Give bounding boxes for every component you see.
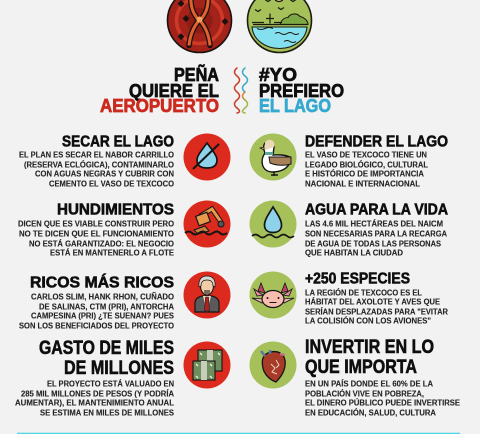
panel: gasto de miles de millones: SE ESTIMA EN MILES DE MILLONES xyxy=(40,409,174,418)
panel: ricos más ricos: CAMPESINA (PRI) ¿TE SUENAN? PUES xyxy=(31,312,174,321)
panel: invertir en lo que importa xyxy=(305,337,460,418)
panel: ricos más ricos: CARLOS SLIM, HANK RHON, CUÑADO xyxy=(31,293,174,302)
panel: +250 especies: HÁBITAT DEL AXOLOTE Y AVES QUE xyxy=(305,298,440,307)
panel: hundimientos: NO ESTÁ GARANTIZADO: EL NEGOCIO xyxy=(29,240,174,249)
panel: gasto de miles de millones: GASTO DE MILES xyxy=(39,338,174,359)
panel: +250 especies: SERÍAN DESPLAZADAS PARA "EVITAR xyxy=(305,308,448,317)
panel: agua para la vida: LAS 4.6 MIL HECTÁREAS DEL NAICM xyxy=(305,220,443,229)
icon: anatomical heart xyxy=(250,342,296,388)
panel: secar el lago: CON AGUAS NEGRAS Y CUBRIR CON xyxy=(35,170,174,179)
panel: secar el lago: SECAR EL LAGO xyxy=(62,134,174,150)
panel: agua para la vida: AGUA PARA LA VIDA xyxy=(305,202,448,218)
panel: gasto de miles de millones xyxy=(15,338,174,418)
icon: sinking excavator xyxy=(184,200,230,248)
panel: ricos más ricos: RICOS MÁS RICOS xyxy=(30,272,174,292)
panel: gasto de miles de millones: 285 MIL MILLONES DE PESOS (Y PODRÍA xyxy=(21,390,174,399)
panel: invertir en lo que importa: EN EDUCACIÓN, SALUD, CULTURA xyxy=(305,409,436,418)
footer bar edge xyxy=(17,433,460,434)
panel: hundimientos: NO TE DICEN QUE EL FUNCIONAMIENTO xyxy=(19,230,174,239)
title: yo prefiero el lago: PREFIERO xyxy=(259,81,344,101)
title: Peña quiere el aeropuerto: QUIERE EL xyxy=(129,81,219,101)
panel: ricos más ricos: DE SALINAS, CTM (PRI), ANTORCHA xyxy=(39,303,174,312)
panel: invertir en lo que importa: EL DINERO PÚBLICO PUEDE INVERTIRSE xyxy=(305,399,460,408)
title: yo prefiero el lago: EL LAGO xyxy=(259,96,331,116)
icon: crossed water drop xyxy=(184,134,230,180)
panel: secar el lago: CEMENTO EL VASO DE TEXCOCO xyxy=(49,180,174,189)
title: Peña quiere el aeropuerto xyxy=(100,64,219,116)
title: Peña quiere el aeropuerto: AEROPUERTO xyxy=(100,96,219,116)
panel: invertir en lo que importa: INVERTIR EN LO xyxy=(305,337,434,358)
title: yo prefiero el lago xyxy=(259,65,344,116)
panel: hundimientos: DICEN QUE ES VIABLE CONSTRUIR PERO xyxy=(18,220,174,229)
panel: defender el lago: E HISTÓRICO DE IMPORTANCIA xyxy=(305,170,424,179)
icon: water drop over waves xyxy=(250,200,296,248)
panel: invertir en lo que importa: EN UN PAÍS DONDE EL 60% DE LA xyxy=(305,380,433,389)
panel: gasto de miles de millones: AUMENTAR), EL MANTENIMIENTO ANUAL xyxy=(15,399,174,408)
panel: hundimientos: HUNDIMIENTOS xyxy=(57,202,174,218)
panel: ricos más ricos: SON LOS BENEFICIADOS DEL PROYECTO xyxy=(19,322,174,331)
icon: lake green emblem xyxy=(248,0,312,52)
panel: defender el lago xyxy=(305,134,448,189)
panel: agua para la vida xyxy=(305,202,448,258)
panel: +250 especies: +250 ESPECIES xyxy=(305,270,410,288)
panel: secar el lago: (RESERVA ECLÓGICA), CONTAMINARLO xyxy=(24,161,174,170)
panel: +250 especies xyxy=(305,270,448,326)
panel: gasto de miles de millones: EL PROYECTO ESTÁ VALUADO EN xyxy=(47,380,174,389)
title: Peña quiere el aeropuerto: PEÑA xyxy=(174,64,219,85)
panel: defender el lago: EL VASO DE TEXCOCO TIENE UN xyxy=(305,151,427,160)
icon: duck xyxy=(250,134,296,180)
panel: agua para la vida: QUE HABITAN LA CIUDAD xyxy=(305,249,403,258)
panel: secar el lago: EL PLAN ES SECAR EL NABOR CARRILLO xyxy=(19,151,174,160)
panel: agua para la vida: SON NECESARIAS PARA LA RECARGA xyxy=(305,230,447,239)
panel: hundimientos xyxy=(18,202,174,258)
icon: rich man portrait xyxy=(184,272,230,318)
panel: +250 especies: LA COLISIÓN CON LOS AVIONES" xyxy=(305,317,431,326)
panel: defender el lago: LEGADO BIOLÓGICO, CULTURAL xyxy=(305,161,428,170)
panel: invertir en lo que importa: POBLACIÓN VIVE EN POBREZA, xyxy=(305,390,424,399)
icon: airport red emblem xyxy=(168,0,232,52)
panel: secar el lago xyxy=(19,134,174,189)
panel: ricos más ricos xyxy=(19,272,174,331)
panel: invertir en lo que importa: QUE IMPORTA xyxy=(305,357,417,378)
icon: wavy divider lines xyxy=(234,68,248,113)
panel: +250 especies: LA REGIÓN DE TEXCOCO ES EL xyxy=(305,289,422,298)
icon: axolotl xyxy=(250,272,296,318)
icon: money stacks xyxy=(184,342,230,388)
panel: defender el lago: NACIONAL E INTERNACIONAL xyxy=(305,180,420,189)
panel: agua para la vida: DE AGUA DE TODAS LAS PERSONAS xyxy=(305,240,441,249)
panel: hundimientos: ESTÁ EN MANTENERLO A FLOTE xyxy=(50,249,174,258)
title: yo prefiero el lago: #YO xyxy=(259,65,297,85)
panel: gasto de miles de millones: DE MILLONES xyxy=(64,358,174,379)
panel: defender el lago: DEFENDER EL LAGO xyxy=(305,134,448,150)
